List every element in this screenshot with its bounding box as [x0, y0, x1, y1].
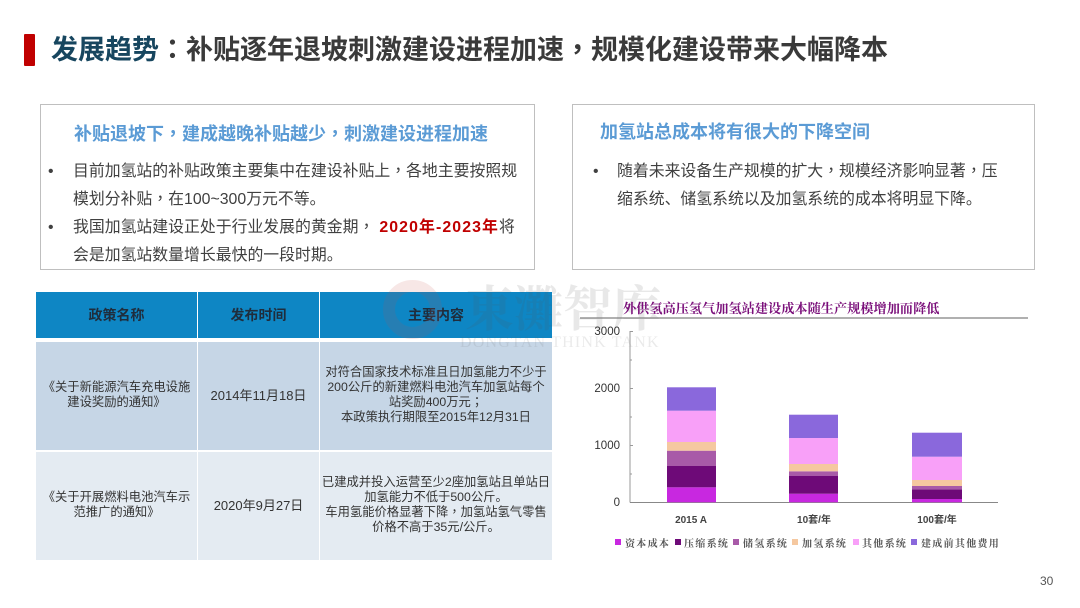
legend — [615, 535, 1000, 550]
text block: subsidy bullets: 目前加氢站的补贴政策主要集中在建设补贴上，各地主要按照规 — [73, 158, 517, 181]
row 2 date — [198, 452, 319, 560]
y axis: 3000 — [594, 326, 620, 338]
row 2 policy name — [36, 452, 197, 560]
text block: subsidy bullets: 我国加氢站建设正处于行业发展的黄金期， 2020年-2023年将 — [73, 214, 515, 237]
title accent bar — [24, 34, 35, 66]
table header: main content: 主要内容 — [408, 306, 464, 322]
text block: cost bullet: 缩系统、储氢系统以及加氢系统的成本将明显下降。 — [617, 191, 982, 208]
table header: main content — [320, 292, 552, 338]
legend: 储氢系统 — [743, 535, 788, 550]
watermark — [383, 271, 661, 351]
row 1 policy name: 《关于新能源汽车充电设施 — [43, 380, 190, 394]
page number: 30 — [1040, 574, 1053, 588]
x axis labels — [675, 513, 957, 526]
legend: 资本成本 — [625, 535, 670, 550]
y axis: 0 — [614, 497, 620, 509]
row 2 content — [320, 452, 552, 560]
row 2 date: 2020年9月27日 — [214, 498, 303, 512]
chart title: 外供氢高压氢气加氢站建设成本随生产规模增加而降低 — [623, 298, 940, 317]
legend: 压缩系统 — [684, 535, 729, 550]
y axis: 2000 — [594, 383, 620, 395]
watermark name: 東灘智库 — [465, 271, 661, 341]
watermark subtitle: DONGTAN THINK TANK — [460, 334, 660, 351]
table header: release date — [198, 292, 319, 338]
text block: subsidy bullets: 会是加氢站数量增长最快的一段时期。 — [73, 247, 343, 264]
row 2 content: 价格不高于35元/公斤。 — [372, 520, 500, 534]
text block: subsidy bullets: • — [48, 219, 54, 236]
text block: cost bullet: • — [593, 163, 599, 180]
row 1 content: 站奖励400万元； — [389, 392, 483, 410]
panel heading: subsidy decline: 补贴退坡下，建成越晚补贴越少，刺激建设进程加速 — [74, 120, 488, 146]
row 1 date: 2014年11月18日 — [211, 388, 306, 402]
legend: 建成前其他费用 — [921, 535, 1000, 550]
panel: total cost decline — [572, 104, 1035, 270]
bar: 2015 A — [667, 387, 716, 502]
table header: release date: 发布时间 — [230, 306, 286, 322]
bar: 10 sets per year — [789, 415, 838, 502]
row 1 content — [320, 342, 552, 450]
legend: 加氢系统 — [802, 535, 847, 550]
x axis labels: 100套/年 — [917, 513, 957, 526]
text block: cost bullet — [593, 158, 998, 208]
text block: subsidy bullets: 模划分补贴，在100~300万元不等。 — [73, 186, 326, 209]
row 1 policy name — [36, 342, 197, 450]
row 1 date — [198, 342, 319, 450]
row 1 content: 200公斤的新建燃料电池汽车加氢站每个 — [327, 380, 545, 394]
y axis: 1000 — [594, 440, 620, 452]
y axis — [594, 326, 633, 509]
panel heading: total cost decline: 加氢站总成本将有很大的下降空间 — [600, 122, 870, 142]
x axis labels: 10套/年 — [797, 513, 831, 526]
row 1 content: 对符合国家技术标准且日加氢能力不少于 — [325, 365, 547, 379]
row 2 content: 已建成并投入运营至少2座加氢站且单站日 — [322, 475, 550, 489]
text block: subsidy bullets — [48, 158, 517, 264]
bar: 100 sets per year — [912, 433, 962, 502]
panel: subsidy decline — [40, 104, 535, 270]
row 2 content: 车用氢能价格显著下降，加氢站氢气零售 — [325, 502, 547, 520]
watermark logo — [383, 280, 442, 339]
text block: subsidy bullets: • — [48, 163, 54, 180]
legend: 其他系统 — [862, 535, 907, 550]
policy table — [36, 292, 552, 560]
x axis labels: 2015 A — [675, 515, 707, 526]
table header: policy name: 政策名称 — [88, 306, 144, 322]
text block: cost bullet: 随着未来设备生产规模的扩大，规模经济影响显著，压 — [617, 158, 998, 181]
bar chart — [580, 298, 1028, 550]
row 2 content: 加氢能力不低于500公斤。 — [364, 490, 508, 504]
title: 发展趋势：补贴逐年退坡刺激建设进程加速，规模化建设带来大幅降本 — [51, 28, 888, 67]
table header: policy name — [36, 292, 197, 338]
row 1 content: 本政策执行期限至2015年12月31日 — [341, 410, 531, 424]
row 2 policy name: 范推广的通知》 — [73, 505, 160, 519]
row 1 policy name: 建设奖励的通知》 — [67, 395, 166, 409]
row 2 policy name: 《关于开展燃料电池汽车示 — [43, 490, 190, 504]
